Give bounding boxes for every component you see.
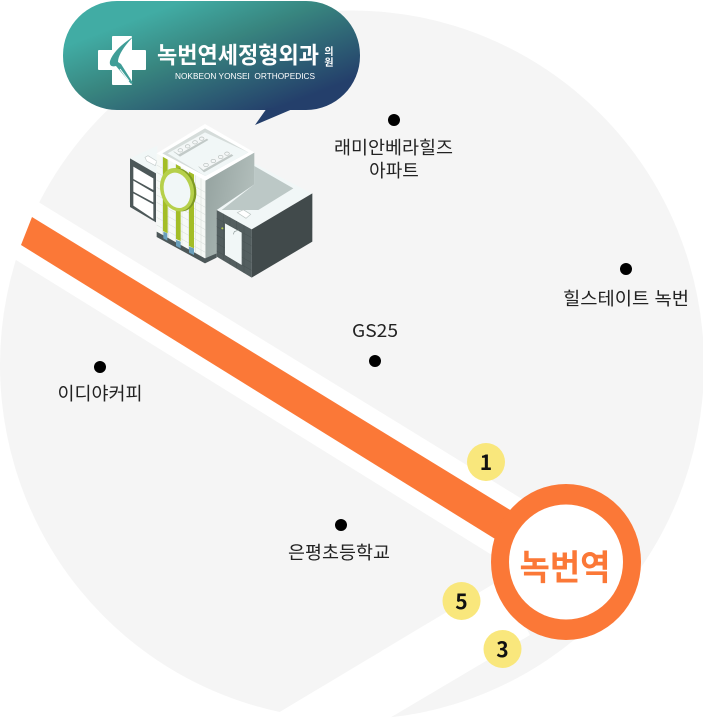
clinic suffix	[324, 46, 334, 69]
landmark: raemian apartment	[334, 114, 453, 183]
landmark: eunpyeong elementary school: 은평초등학교	[288, 539, 390, 565]
landmark: hillstate: 힐스테이트 녹번	[563, 285, 689, 311]
landmark: ediya coffee: 이디야커피	[58, 380, 142, 406]
upper road white band	[0, 166, 540, 560]
station name: 녹번역	[520, 540, 610, 591]
landmark: hillstate	[563, 263, 689, 311]
landmark: GS25: GS25	[352, 317, 398, 343]
building illustration	[130, 124, 312, 278]
icon: medical cross with knee	[98, 36, 146, 85]
clinic name: 녹번연세정형외과	[157, 36, 319, 70]
clinic suffix: 원	[324, 56, 334, 69]
exit 5 marker: 5	[455, 586, 468, 616]
landmark: ediya coffee	[58, 361, 142, 406]
exit 3 marker: 3	[496, 634, 509, 664]
clinic suffix: 의	[324, 46, 334, 58]
exit 5 marker	[442, 582, 480, 620]
english name: NOKBEON YONSEI ORTHOPEDICS	[175, 71, 315, 81]
landmark: raemian apartment: 아파트	[369, 157, 419, 183]
exit 1 marker	[467, 443, 505, 481]
landmark: GS25	[352, 317, 398, 367]
exit 3 marker	[484, 630, 522, 668]
exit 1 marker: 1	[480, 447, 492, 477]
landmark: raemian apartment: 래미안베라힐즈	[334, 134, 453, 160]
lower road white band	[228, 580, 530, 721]
station ring	[491, 484, 641, 640]
orange rail line	[21, 217, 520, 542]
speech bubble logo	[63, 1, 360, 125]
landmark: eunpyeong elementary school	[288, 519, 390, 565]
